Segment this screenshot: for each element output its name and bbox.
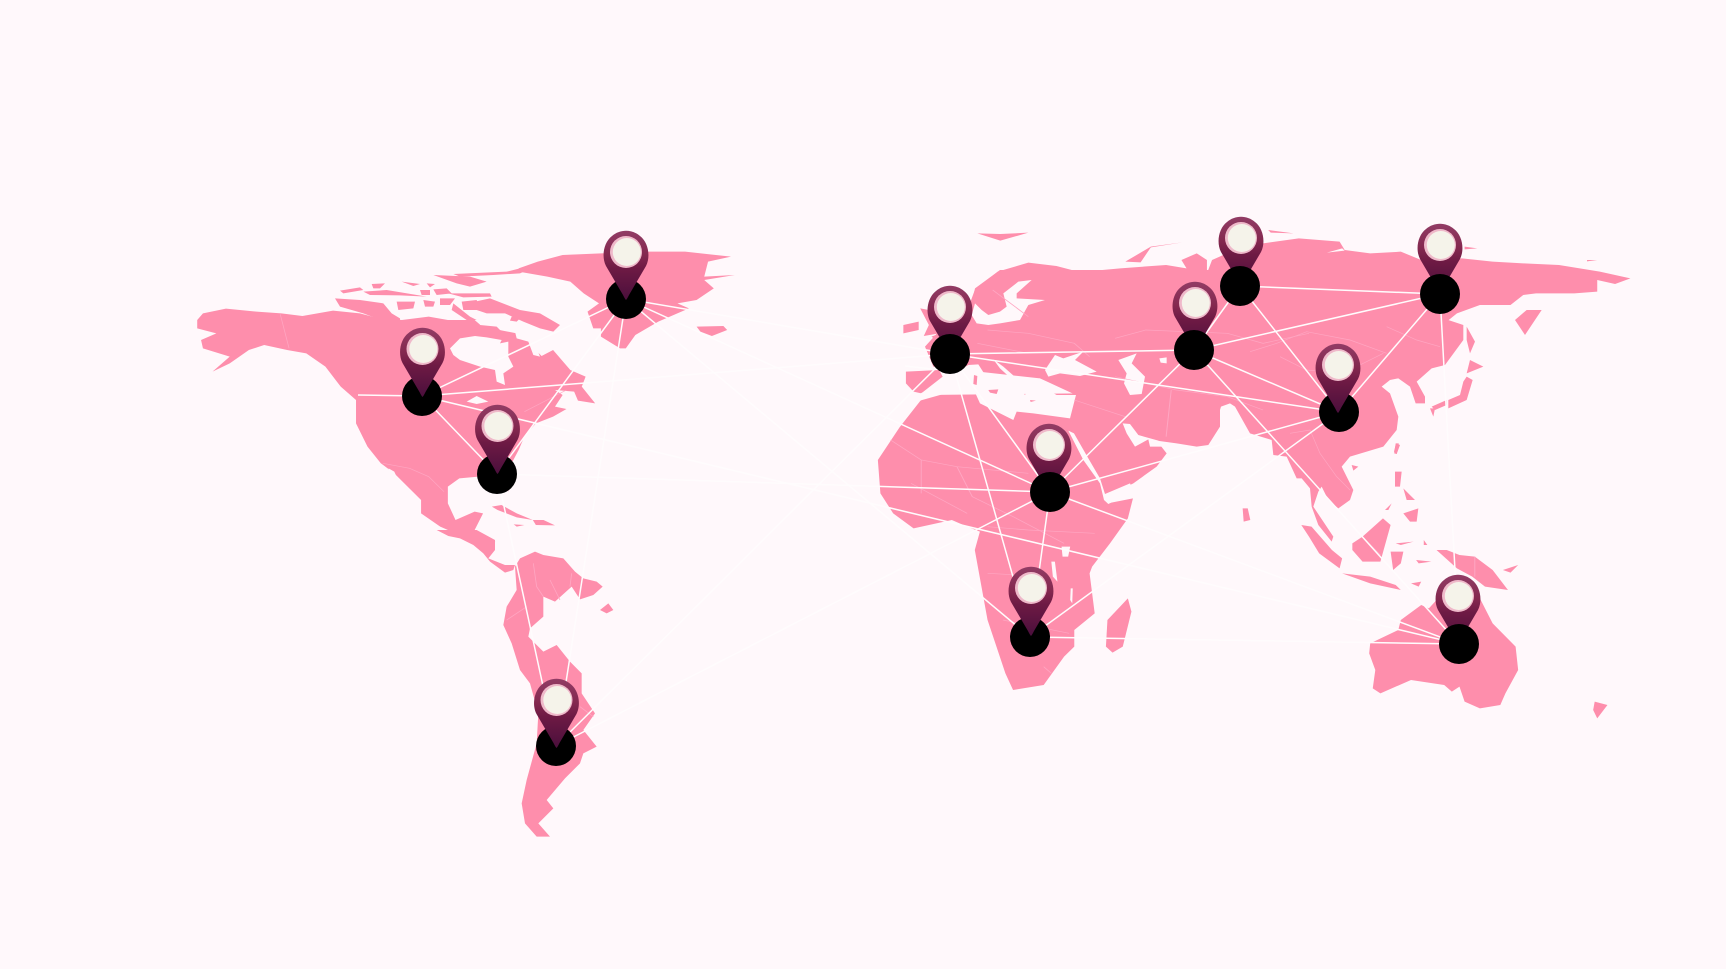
world map bbox=[197, 230, 1630, 837]
pin: Canada / USA west bbox=[400, 328, 445, 416]
Russia and northern Eurasia bbox=[903, 230, 1630, 393]
Africa, Australia and southern islands bbox=[878, 393, 1607, 718]
pin: North Russia bbox=[1219, 217, 1263, 306]
Europe, Middle East and Arabia bbox=[925, 270, 1220, 497]
Canada: Hudson Bay and Arctic islands bbox=[335, 263, 560, 404]
pin: North-East Africa bbox=[1027, 424, 1071, 512]
faint borders over Europe and the Middle East bbox=[977, 290, 1309, 437]
pin: Australia bbox=[1436, 575, 1480, 664]
pin: China bbox=[1316, 344, 1360, 432]
pin: East Russia bbox=[1418, 224, 1462, 314]
connection lines between locations bbox=[358, 286, 1459, 746]
pin: South America bbox=[534, 679, 579, 766]
South and Central America bbox=[437, 530, 613, 837]
pin: Europe bbox=[928, 286, 972, 374]
Mediterranean, inland seas and Red Sea bbox=[900, 280, 1167, 504]
pin: Greenland bbox=[604, 231, 648, 319]
pin: Southern Africa bbox=[1009, 567, 1053, 657]
pin: USA east bbox=[475, 405, 520, 494]
pin: Central Asia bbox=[1173, 282, 1217, 370]
East Asia and Indochina bbox=[1215, 310, 1542, 542]
North America and Greenland bbox=[197, 252, 735, 542]
